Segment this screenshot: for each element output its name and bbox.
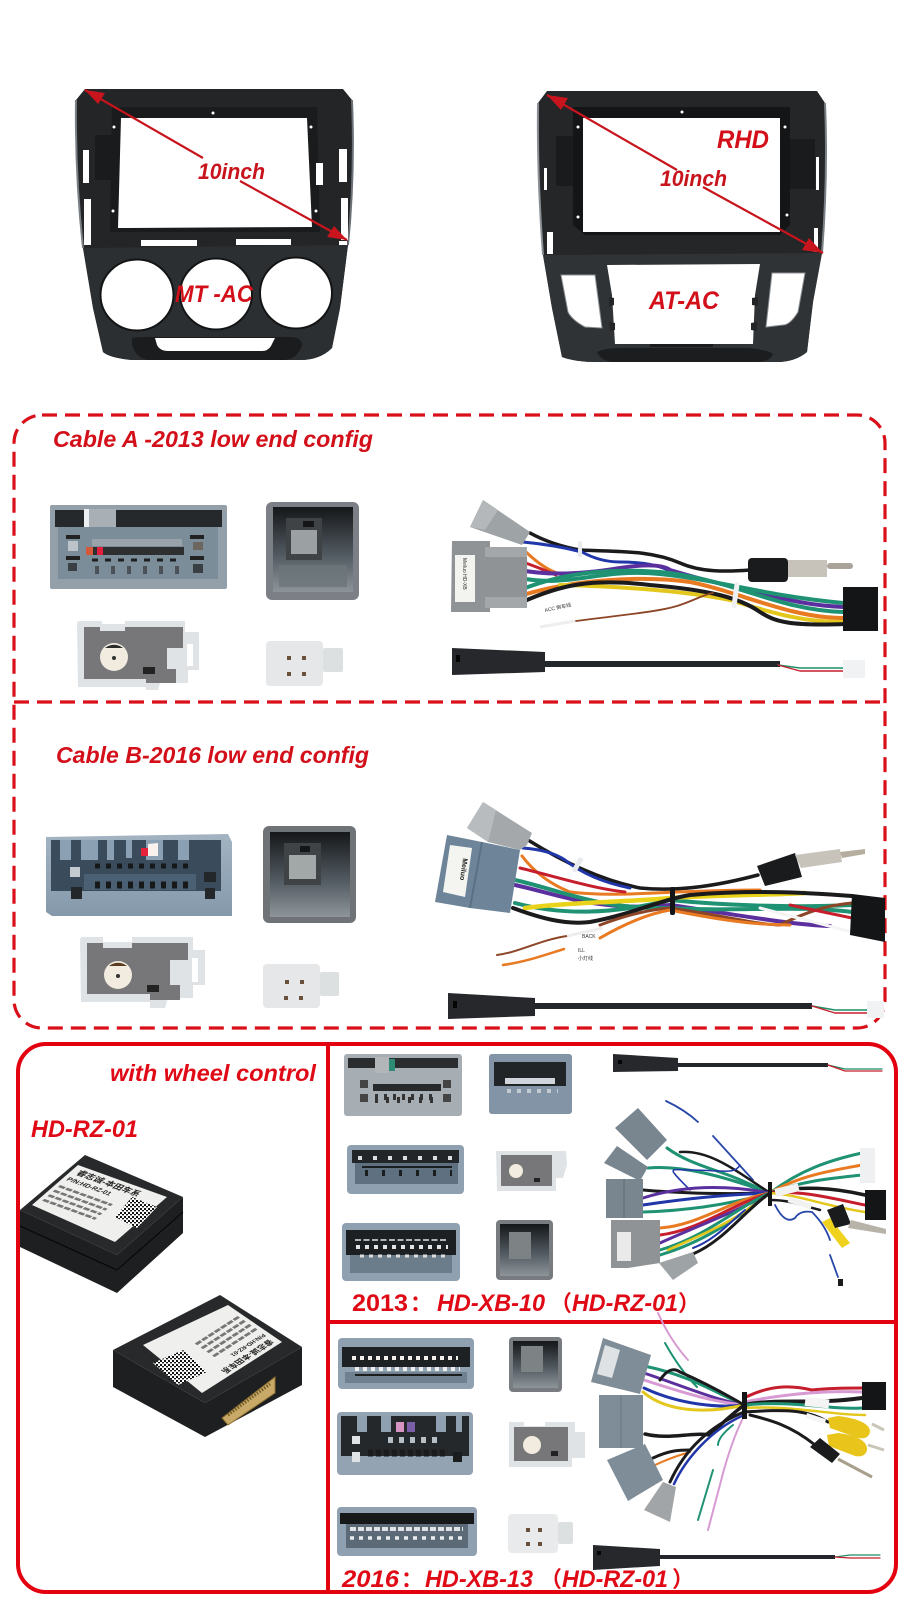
caption: 2016 HD-XB-13: ） [672, 1567, 694, 1592]
connector: A white plug [266, 641, 343, 686]
connector: D1 socket [338, 1338, 474, 1389]
wiring harness: cable B: BACK [582, 934, 596, 940]
label: 10inch AT-AC: 10inch [660, 166, 727, 191]
panel: AT-AC radio frame [538, 91, 826, 362]
wiring harness: cable A [451, 500, 878, 631]
connector: A square socket [266, 502, 359, 600]
connector: C3 socket [347, 1145, 464, 1194]
cable: B video lead [448, 993, 884, 1019]
heading: cable B: Cable B-2016 low end config [56, 742, 369, 768]
connector: D4 antenna socket [509, 1422, 585, 1467]
connector: C1 socket [344, 1054, 462, 1116]
connector: D3 socket [337, 1412, 473, 1475]
connector grid: 2013 HD-XB-10 [342, 1054, 572, 1281]
caption: 2013 HD-XB-10: HD-RZ-01 [572, 1290, 678, 1317]
divider: dashed line between cable A and B [14, 700, 885, 704]
connector: D2 square socket [509, 1337, 562, 1392]
caption: 2016 HD-XB-13: HD-RZ-01 [562, 1566, 668, 1593]
connector: C5 socket [342, 1223, 460, 1281]
caption: 2013 HD-XB-10: ） [678, 1291, 700, 1316]
connector: A large grey socket [50, 505, 227, 589]
connector: C4 antenna socket [496, 1151, 567, 1191]
caption: 2016 HD-XB-13: ： [401, 1567, 423, 1592]
module: upper HD-RZ-01 box: P/N:HD-RZ-01 [64, 1177, 113, 1197]
connector: B antenna socket [80, 937, 205, 1008]
arrow: 10 inch diagonal on AT-AC frame [547, 95, 823, 253]
caption: 2016 HD-XB-13: 2016 [341, 1566, 400, 1593]
connector: B large blue socket [46, 834, 232, 916]
caption: 2013 HD-XB-10: HD-XB-10 [437, 1290, 546, 1317]
wiring harness: cable B: 小灯线 [578, 955, 593, 962]
wiring harness: cable B [435, 802, 885, 965]
wiring harness: cable B: ILL [578, 948, 585, 954]
connector: C2 socket [489, 1054, 572, 1114]
wiring harness: 2013 HD-XB-10 [604, 1101, 886, 1286]
panel: wheel control box [18, 1044, 896, 1592]
wiring harness: cable A: ACC 倒车线 [544, 602, 572, 614]
arrow: 10 inch diagonal on MT-AC frame [85, 90, 347, 240]
heading: with wheel control: with wheel control [110, 1060, 317, 1086]
module: lower HD-RZ-01 box with gold connector: 睿志诚-本田车系 [219, 1338, 276, 1375]
panel: MT-AC radio frame [76, 89, 353, 360]
caption: 2013 HD-XB-10: （ [550, 1291, 572, 1316]
caption: 2013 HD-XB-10 [352, 1290, 700, 1317]
connector grid: 2016 HD-XB-13 [337, 1337, 585, 1556]
cable: 2013 video lead [613, 1054, 882, 1072]
connector: D5 socket [337, 1507, 477, 1556]
module: lower HD-RZ-01 box with gold connector [113, 1295, 302, 1437]
caption: 2016 HD-XB-13: HD-XB-13 [425, 1566, 534, 1593]
connector: A antenna socket [77, 621, 199, 690]
module: lower HD-RZ-01 box with gold connector: P/N:HD-RZ-01 [228, 1332, 266, 1357]
connector: B white plug [263, 964, 339, 1008]
heading: cable A: Cable A -2013 low end config [53, 426, 373, 452]
connector: C6 square socket [496, 1220, 553, 1280]
heading: HD-RZ-01: HD-RZ-01 [31, 1116, 138, 1143]
label: MT-AC: MT -AC [175, 281, 254, 308]
caption: 2016 HD-XB-13 [341, 1566, 694, 1593]
cable: A video lead [452, 648, 865, 678]
caption: 2013 HD-XB-10: 2013 [352, 1290, 408, 1317]
caption: 2013 HD-XB-10: ： [410, 1291, 432, 1316]
panel: dashed cable A and B box [14, 415, 885, 1028]
wiring harness: cable B: Meiluo [458, 858, 468, 881]
cable: 2016 video lead [593, 1545, 880, 1570]
connector: B square socket [263, 826, 356, 923]
wiring harness: 2016 HD-XB-13 [591, 1313, 886, 1530]
label: RHD: RHD [717, 126, 769, 154]
module: upper HD-RZ-01 box [20, 1155, 183, 1293]
module: upper HD-RZ-01 box: 睿志诚-本田车系 [74, 1168, 144, 1198]
label: AT-AC: AT-AC [648, 287, 720, 315]
caption: 2016 HD-XB-13: （ [540, 1567, 562, 1592]
connector: D6 white plug [508, 1514, 573, 1553]
label: 10inch MT-AC: 10inch [198, 159, 265, 184]
wiring harness: cable A: Meiluo HD-XB [461, 558, 467, 590]
